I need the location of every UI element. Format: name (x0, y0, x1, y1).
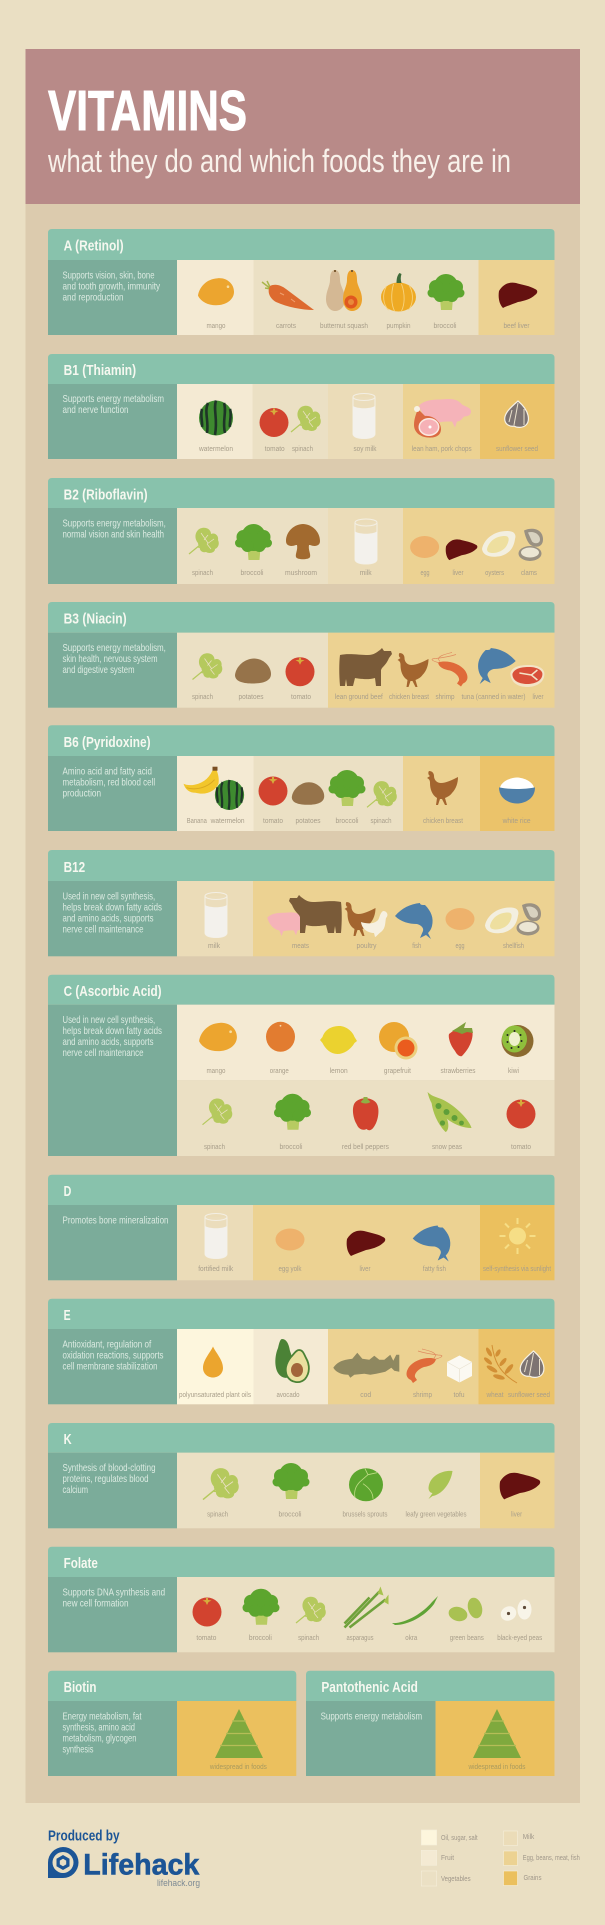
food: self-synthesis via sunlight: self-synthesis via sunlight (483, 1264, 552, 1273)
food: watermelon (198, 400, 233, 453)
food: green beans (447, 1596, 484, 1642)
description: and nerve function (62, 404, 129, 416)
description (48, 756, 177, 831)
description: Used in new cell synthesis, (62, 1014, 155, 1026)
heading bar (306, 1671, 554, 1701)
food: tomato (258, 776, 288, 825)
food: egg yolk (276, 1228, 304, 1273)
heading: K (64, 1431, 72, 1448)
food: shellfish (485, 903, 541, 950)
description (48, 1577, 177, 1652)
food: broccoli (328, 770, 366, 825)
food group cells (177, 260, 554, 335)
food: lean ham, pork chops: lean ham, pork chops (412, 444, 472, 453)
food: watermelon (210, 780, 245, 825)
heading bar (48, 602, 554, 633)
legend: Oil, sugar, salt (441, 1833, 478, 1842)
food: potatoes (292, 782, 324, 825)
food: polyunsaturated plant oils: polyunsaturated plant oils (179, 1390, 251, 1399)
food: okra: okra (405, 1633, 418, 1642)
food: broccoli: broccoli (249, 1633, 272, 1642)
food group cells (177, 633, 554, 708)
food group cells (177, 1453, 554, 1528)
food: spinach (296, 1597, 326, 1642)
food: fish (395, 903, 433, 950)
food: self-synthesis via sunlight (483, 1218, 552, 1273)
food: green beans: green beans (450, 1633, 484, 1642)
food: chicken breast: chicken breast (389, 692, 430, 701)
footer credit (48, 1828, 200, 1888)
heading: D (64, 1183, 71, 1200)
food: red bell peppers (342, 1097, 389, 1151)
food group cells (177, 881, 554, 956)
food: butternut squash (320, 270, 368, 330)
heading: Biotin (64, 1679, 96, 1696)
heading: Pantothenic Acid (321, 1679, 418, 1696)
description (48, 1205, 177, 1280)
food: clams (518, 529, 543, 577)
food: wheat (483, 1345, 517, 1399)
food: spinach: spinach (292, 444, 313, 453)
food: egg (446, 908, 474, 950)
description (48, 633, 177, 708)
description: metabolism, glycogen (62, 1732, 137, 1744)
food: liver (500, 1473, 540, 1518)
food: spinach (367, 781, 397, 825)
food: watermelon: watermelon (210, 816, 245, 825)
food: spinach (192, 653, 222, 701)
food: strawberries: strawberries (440, 1066, 476, 1075)
description: Supports energy metabolism (62, 393, 164, 405)
description: Supports energy metabolism, (62, 642, 166, 654)
description: oxidation reactions, supports (62, 1350, 164, 1362)
food: beef liver (499, 283, 537, 330)
food: fortified milk: fortified milk (198, 1264, 233, 1273)
food: lemon: lemon (330, 1066, 348, 1075)
food: chicken breast (389, 653, 430, 701)
heading bar (48, 725, 554, 756)
food: liver: liver (532, 692, 544, 701)
food: broccoli (272, 1463, 310, 1518)
food: widespread pyramid: widespread in foods (209, 1762, 267, 1771)
food: tuna: tuna (canned in water) (462, 692, 526, 701)
heading: B2 (Riboflavin) (64, 486, 148, 504)
food: shrimp (407, 1349, 442, 1399)
description: helps break down fatty acids (62, 1025, 162, 1037)
heading bar (48, 1175, 554, 1205)
panel: vitamin B2 (48, 478, 554, 584)
food: egg: egg (456, 941, 464, 950)
legend: Vegetables (441, 1874, 471, 1883)
food: orange: orange (270, 1066, 289, 1075)
food: carrots: carrots (276, 321, 296, 330)
food group cells (177, 756, 554, 831)
food: potatoes: potatoes (238, 692, 264, 701)
content panel (26, 204, 580, 1803)
description (48, 1005, 177, 1156)
description: Amino acid and fatty acid (62, 766, 152, 778)
food: egg: egg (420, 568, 430, 577)
food: snow peas (428, 1092, 472, 1151)
food: soy milk: soy milk (354, 444, 377, 453)
food: snow peas: snow peas (432, 1142, 462, 1151)
food: banana (184, 767, 219, 825)
food: mushroom: mushroom (285, 568, 317, 577)
food: tomato: tomato (196, 1633, 216, 1642)
food: wheat: wheat (486, 1390, 504, 1399)
food: broccoli: broccoli (434, 321, 457, 330)
food: sunflower seed: sunflower seed (496, 444, 538, 453)
food: broccoli (274, 1094, 311, 1151)
heading: E (64, 1307, 71, 1324)
food: milk (205, 892, 227, 950)
food: tomato: tomato (265, 444, 285, 453)
food group cells (177, 508, 554, 584)
description: and amino acids, supports (62, 1036, 154, 1048)
food: fatty fish: fatty fish (423, 1264, 446, 1273)
heading: A (Retinol) (64, 238, 124, 254)
food: spinach: spinach (370, 816, 392, 825)
panel: vitamin B12 (48, 850, 554, 956)
food: lean ground beef: lean ground beef (335, 692, 384, 701)
panel: vitamin B3 (48, 602, 554, 708)
food: tomato (192, 1598, 222, 1642)
food: tuna (462, 648, 526, 701)
description: Energy metabolism, fat (62, 1710, 142, 1722)
heading: C (Ascorbic Acid) (64, 983, 162, 1000)
description: proteins, regulates blood (62, 1473, 149, 1485)
heading bar (48, 478, 554, 508)
description: normal vision and skin health (62, 528, 164, 540)
heading: Folate (64, 1555, 98, 1572)
title: VITAMINS (48, 79, 247, 143)
food: fortified milk (198, 1214, 233, 1273)
food: broccoli (235, 524, 272, 577)
food group cells (177, 1329, 554, 1404)
heading: B12 (64, 859, 85, 876)
food: shrimp: shrimp (436, 692, 454, 701)
food group cell (436, 1701, 554, 1776)
food: white rice: white rice (502, 816, 531, 825)
food: mushroom (285, 524, 320, 577)
food: polyunsaturated plant oils (179, 1346, 251, 1399)
food: mango (199, 1023, 237, 1075)
legend: Fruit (441, 1853, 455, 1862)
food: potatoes (235, 658, 271, 701)
food: mango: mango (206, 321, 226, 330)
legend (421, 1830, 580, 1886)
food group cells (177, 384, 554, 459)
food: liver (510, 665, 544, 701)
description: nerve cell maintenance (62, 924, 144, 936)
description: Supports energy metabolism (321, 1710, 422, 1722)
food: oysters: oysters (485, 568, 504, 577)
food: milk (355, 519, 377, 577)
heading: B3 (Niacin) (64, 610, 127, 628)
food: spinach: spinach (192, 568, 213, 577)
description (48, 384, 177, 459)
description: synthesis, amino acid (62, 1722, 135, 1734)
food: black-eyed peas (497, 1600, 542, 1642)
description (48, 1453, 177, 1528)
food: spinach: spinach (204, 1142, 225, 1151)
produced by: Produced by (48, 1828, 120, 1845)
panel: vitamin B6 (48, 725, 554, 831)
panel: vitamin C (48, 975, 554, 1156)
description: Supports DNA synthesis and (62, 1586, 165, 1598)
panel: vitamin E (48, 1299, 554, 1404)
description (48, 508, 177, 584)
title banner (26, 49, 580, 204)
food: fatty fish (413, 1226, 450, 1273)
panel: folate (48, 1547, 554, 1652)
food: milk: milk (208, 941, 220, 950)
food: watermelon: watermelon (198, 444, 233, 453)
food: liver: liver (360, 1264, 371, 1273)
food: brussels sprouts: brussels sprouts (342, 1510, 388, 1518)
legend: Grains (524, 1873, 542, 1882)
food: white rice (499, 778, 535, 825)
icon: lifehack logo (48, 1847, 78, 1878)
description: cell membrane stabilization (62, 1360, 158, 1372)
heading bar (48, 1671, 296, 1701)
food: asparagus: asparagus (346, 1633, 374, 1642)
food: spinach: spinach (192, 692, 213, 701)
food: sunflower seed (508, 1351, 550, 1399)
wordmark: Lifehack (83, 1848, 200, 1881)
food: tomato (260, 408, 288, 453)
food: fish: fish (412, 941, 421, 950)
panel: vitamin B1 (48, 354, 554, 459)
description: new cell formation (62, 1598, 129, 1610)
food: beef liver: beef liver (504, 321, 530, 330)
food: lean ham, pork chops (412, 399, 472, 453)
food: tomato: tomato (511, 1142, 531, 1151)
heading bar (48, 1423, 554, 1453)
food: widespread pyramid (468, 1709, 526, 1771)
food: pumpkin (381, 273, 416, 330)
food: spinach (203, 1468, 239, 1518)
food: orange (266, 1022, 295, 1075)
description: nerve cell maintenance (62, 1047, 144, 1059)
food group cell (177, 1701, 296, 1776)
food: grapefruit: grapefruit (384, 1066, 412, 1075)
food: chicken breast (423, 771, 464, 825)
food: pumpkin: pumpkin (386, 321, 410, 330)
description: skin health, nervous system (62, 653, 158, 665)
food: liver: liver (452, 568, 464, 577)
food: widespread pyramid: widespread in foods (468, 1762, 526, 1771)
food: broccoli (242, 1589, 280, 1642)
food: shellfish: shellfish (503, 941, 524, 950)
heading bar (48, 975, 554, 1005)
food: butternut squash: butternut squash (320, 321, 368, 330)
description: and tooth growth, immunity (62, 280, 161, 292)
food: shrimp: shrimp (413, 1390, 432, 1399)
food: shrimp (432, 652, 467, 701)
description: calcium (62, 1484, 88, 1496)
food: broccoli: broccoli (280, 1142, 303, 1151)
heading bar (48, 229, 554, 260)
food: chicken breast: chicken breast (423, 816, 464, 825)
food: liver: liver (511, 1510, 522, 1518)
description (48, 1329, 177, 1404)
food: cod: cod (360, 1390, 371, 1399)
food: soy milk (353, 394, 377, 453)
food: potatoes: potatoes (296, 816, 321, 825)
description: synthesis (62, 1744, 94, 1756)
food: kiwi: kiwi (508, 1066, 519, 1075)
food: meats (267, 895, 342, 950)
url: lifehack.org (157, 1878, 200, 1888)
food: sunflower seed (496, 401, 538, 453)
panel: vitamin K (48, 1423, 554, 1528)
food: broccoli: broccoli (240, 568, 264, 577)
food: tofu: tofu (454, 1390, 464, 1399)
food: leafy green vegetables (406, 1471, 467, 1518)
food group cells (177, 1005, 554, 1156)
description (48, 881, 177, 956)
food: banana: Banana (187, 816, 207, 825)
food: poultry (344, 902, 387, 950)
food: tomato (506, 1100, 536, 1151)
food: okra (392, 1596, 438, 1642)
food: tomato: tomato (263, 816, 283, 825)
food: clams: clams (521, 568, 537, 577)
food: avocado (275, 1339, 309, 1399)
food: leafy green vegetables: leafy green vegetables (406, 1510, 467, 1518)
food: black-eyed peas: black-eyed peas (497, 1633, 542, 1642)
food: spinach (202, 1099, 232, 1151)
food: egg (410, 536, 439, 577)
food: asparagus (344, 1586, 388, 1642)
description: Antioxidant, regulation of (62, 1338, 151, 1350)
food: broccoli: broccoli (278, 1510, 302, 1518)
food: broccoli: broccoli (336, 816, 359, 825)
food: widespread pyramid (209, 1709, 267, 1771)
description: and amino acids, supports (62, 912, 154, 924)
food: spinach (189, 528, 219, 577)
food: tofu (447, 1356, 472, 1399)
description: and reproduction (62, 292, 124, 304)
description: Used in new cell synthesis, (62, 890, 155, 902)
description: Promotes bone mineralization (62, 1214, 169, 1226)
description: Supports vision, skin, bone (62, 270, 155, 282)
heading: B1 (Thiamin) (64, 362, 136, 379)
panel: vitamin D (48, 1175, 554, 1280)
food: spinach: spinach (207, 1510, 228, 1518)
food: tomato: tomato (291, 692, 311, 701)
food: milk: milk (360, 568, 372, 577)
description: Supports energy metabolism, (62, 518, 166, 530)
food: cod (333, 1353, 399, 1399)
food: broccoli (428, 274, 464, 330)
legend: Milk (523, 1832, 534, 1841)
food: red bell peppers: red bell peppers (342, 1142, 389, 1151)
heading bar (48, 354, 554, 384)
food: lean ground beef (335, 648, 392, 701)
food: liver (446, 539, 477, 577)
food: sunflower seed: sunflower seed (508, 1390, 550, 1399)
food: avocado: avocado (276, 1390, 300, 1399)
heading bar (48, 1547, 554, 1577)
food: lemon (320, 1026, 357, 1075)
food: kiwi (502, 1025, 534, 1075)
food: mango (198, 278, 234, 330)
description: metabolism, red blood cell (62, 776, 155, 788)
food: spinach (291, 406, 321, 453)
food: carrots (262, 281, 314, 330)
heading: B6 (Pyridoxine) (64, 734, 151, 751)
description: Synthesis of blood-clotting (62, 1462, 156, 1474)
food: tomato (286, 657, 314, 701)
legend: Egg, beans, meat, fish (523, 1853, 580, 1862)
heading bar (48, 850, 554, 881)
food: grapefruit (379, 1022, 418, 1075)
description: and digestive system (62, 664, 135, 676)
heading bar (48, 1299, 554, 1329)
panel: biotin (48, 1671, 296, 1776)
description (306, 1701, 436, 1776)
food: poultry: poultry (356, 941, 377, 950)
description (48, 1701, 177, 1776)
food group cell (177, 1577, 554, 1652)
food: spinach: spinach (298, 1633, 319, 1642)
description (48, 260, 177, 335)
description: helps break down fatty acids (62, 902, 162, 914)
food: mango: mango (206, 1066, 226, 1075)
food group cells (177, 1205, 554, 1280)
food: brussels sprouts (342, 1468, 388, 1518)
food: oysters (482, 531, 515, 577)
food: liver (347, 1231, 385, 1273)
panel: pantothenic acid (306, 1671, 554, 1776)
description: production (62, 788, 101, 800)
food: strawberries (440, 1022, 476, 1075)
panel: vitamin A (48, 229, 554, 335)
food: egg yolk: egg yolk (278, 1264, 302, 1273)
food: meats: meats (292, 941, 309, 950)
